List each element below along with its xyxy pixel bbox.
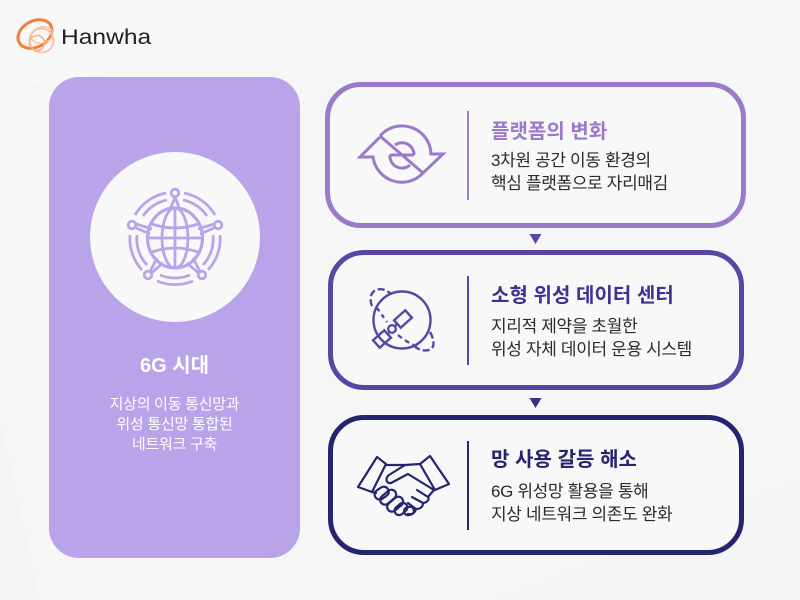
card text: 지리적 제약을 초월한 (491, 317, 637, 336)
panel heading: 6G 시대 (140, 355, 209, 377)
logo: Hanwha (16, 18, 152, 54)
card: platform change (325, 82, 746, 228)
card title: 소형 위성 데이터 센터 (491, 285, 674, 307)
card text: 6G 위성망 활용을 통해 (491, 482, 648, 500)
icon: handshake (356, 454, 450, 516)
divider (467, 441, 468, 530)
card title: 플랫폼의 변화 (491, 121, 607, 143)
card: network conflict resolution (328, 415, 744, 555)
icon circle (90, 152, 260, 322)
icon: satellite orbit (369, 288, 435, 352)
card title: 망 사용 갈등 해소 (491, 449, 637, 471)
card text (491, 151, 668, 193)
card text (491, 317, 692, 359)
card text: 3차원 공간 이동 환경의 (491, 151, 651, 170)
logo symbol (16, 18, 54, 54)
panel text: 지상의 이동 통신망과 (110, 396, 239, 413)
card text: 지상 네트워크 의존도 완화 (491, 504, 672, 524)
panel text: 네트워크 구축 (132, 436, 217, 453)
card text (491, 482, 672, 524)
arrow 2 (530, 398, 542, 408)
panel text (110, 396, 240, 453)
logo wordmark: Hanwha (61, 26, 151, 49)
panel: 6G era (49, 77, 300, 558)
icon: refresh e (356, 124, 447, 184)
icon: globe network (126, 188, 224, 286)
divider (467, 276, 468, 365)
card: small satellite data center (328, 250, 744, 390)
panel text: 위성 통신망 통합된 (116, 416, 233, 433)
card text: 핵심 플랫폼으로 자리매김 (491, 174, 668, 193)
divider (467, 111, 468, 200)
arrow 1 (530, 234, 542, 244)
card text: 위성 자체 데이터 운용 시스템 (491, 340, 692, 359)
